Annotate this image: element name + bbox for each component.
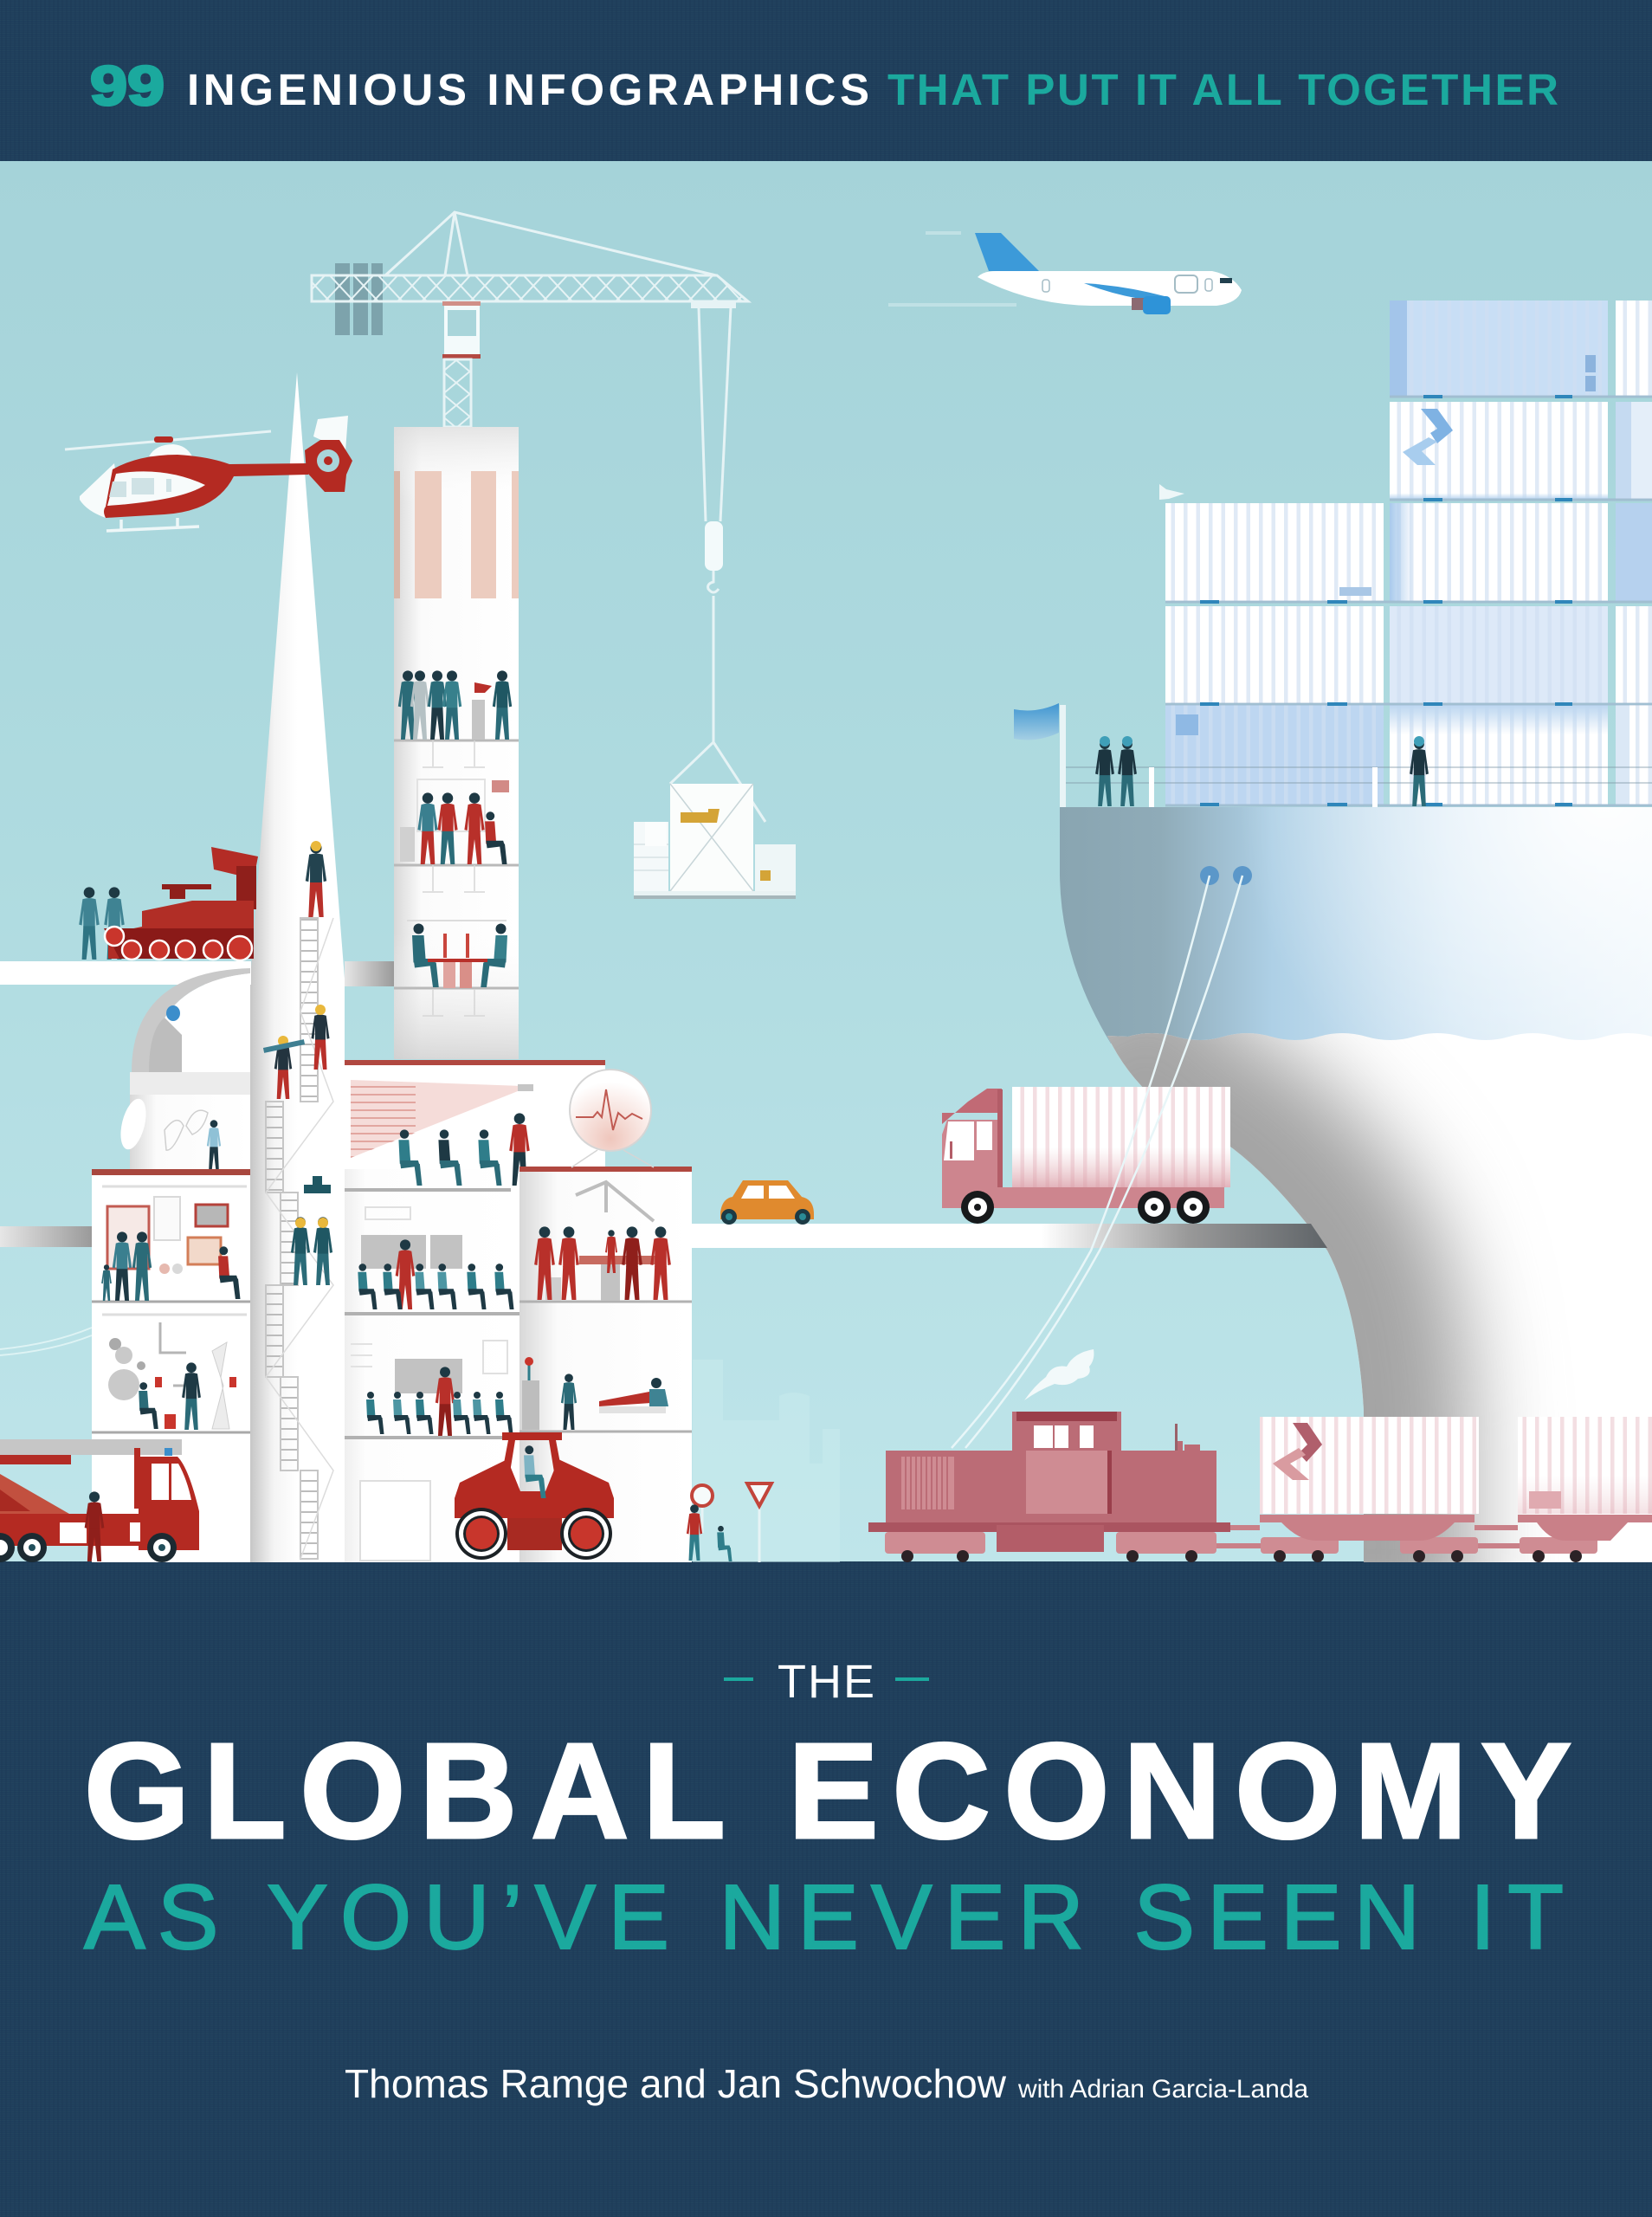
illustration: central building [345, 1060, 605, 1562]
cab [139, 1457, 199, 1550]
body [0, 1514, 139, 1546]
wheels [0, 1533, 177, 1562]
red body [104, 455, 308, 518]
cargo [634, 784, 796, 899]
cable and sling [670, 596, 765, 822]
hook [708, 571, 719, 592]
floors [394, 740, 519, 988]
cabin window panel [107, 471, 205, 506]
gallery floor [101, 1197, 241, 1301]
speed lines [888, 233, 1016, 305]
cabin [442, 301, 481, 359]
dome slot [149, 1018, 182, 1072]
illustration: tank and soldiers [79, 847, 258, 960]
panel: sky illustration background [0, 161, 1652, 1561]
body [455, 1459, 614, 1518]
text: ingenious infographics: INGENIOUS INFOGRAPHICS [187, 65, 869, 114]
boom [0, 1439, 182, 1455]
wheels [455, 1508, 612, 1560]
authors [345, 2061, 1308, 2106]
illustration: tower with offices [394, 427, 519, 1059]
text: 99: 99 [90, 55, 165, 117]
kneeling person [207, 1120, 221, 1170]
dish [116, 1096, 151, 1152]
wheels [961, 1191, 1210, 1224]
tail ring [305, 440, 352, 492]
ring sign [701, 1508, 703, 1533]
hoist lines [699, 307, 731, 521]
workers [687, 1504, 702, 1561]
co-author: with Adrian Garcia-Landa [1017, 2075, 1308, 2104]
driver [524, 1445, 545, 1498]
container wagon 1 [1260, 1417, 1479, 1541]
lecture hall [351, 1080, 533, 1186]
radar mast [1159, 484, 1184, 500]
heading: the [724, 1656, 929, 1708]
ladders [266, 918, 333, 1559]
illustration: road signs and workers [687, 1483, 771, 1562]
floors [92, 1302, 250, 1432]
illustration: truck [942, 1087, 1230, 1224]
operating room [534, 1182, 671, 1301]
launcher [211, 847, 258, 879]
patient room [522, 1357, 668, 1430]
main authors: Thomas Ramge and Jan Schwochow [345, 2061, 1007, 2106]
illustration: fire truck [0, 1439, 199, 1562]
yield sign [758, 1505, 760, 1562]
faint skyline [693, 1360, 840, 1562]
icon: magnifier with heartbeat [570, 1070, 654, 1167]
fuselage [978, 271, 1242, 306]
trailer [1012, 1087, 1230, 1187]
dome outer ring [132, 968, 250, 1072]
mast lattice [444, 359, 471, 427]
gun and turret [162, 884, 211, 899]
beacon [165, 1448, 172, 1456]
heading: top tagline [90, 55, 1558, 117]
couplers [1216, 1528, 1520, 1546]
soldiers [79, 887, 125, 960]
rotor [65, 431, 271, 449]
container clips [1165, 397, 1652, 805]
illustration: train [868, 1349, 1652, 1562]
flag [1014, 703, 1066, 807]
classroom lower [351, 1341, 513, 1436]
skids [106, 518, 199, 531]
bar: left connector [0, 1226, 92, 1247]
containers column C [1616, 301, 1652, 805]
illustration: left building [92, 1169, 250, 1562]
illustration: plane [888, 233, 1242, 314]
frame [868, 1522, 1230, 1532]
chassis [942, 1187, 1224, 1208]
anchor holes [1200, 866, 1252, 885]
chevron logo on container [1421, 409, 1453, 443]
hook block [705, 521, 723, 571]
illustration: observatory [116, 968, 250, 1170]
panel: bottom band [0, 1561, 1652, 2217]
red roof [345, 1060, 605, 1065]
illustration: main road [692, 1224, 1327, 1248]
illustration: ship hull and containers [1014, 301, 1652, 1645]
illustration: tall spire tower [250, 372, 345, 1562]
people on deck [1095, 736, 1429, 806]
locomotive body [886, 1412, 1216, 1522]
rotor hub [149, 444, 192, 456]
subtitle: as you've never seen it: AS YOU’VE NEVER SEEN IT [84, 1866, 1564, 1968]
wing [1084, 283, 1165, 301]
office: meeting floor 2 [400, 779, 509, 864]
illustration: crane [312, 212, 796, 899]
entrance door [360, 1481, 430, 1561]
counterweights [335, 263, 383, 335]
word the: THE [778, 1656, 874, 1708]
bogies [885, 1532, 1597, 1554]
engine [1132, 298, 1145, 310]
floors [519, 1302, 692, 1432]
illustration: right building [519, 1167, 692, 1562]
office: desk floor 3 [407, 921, 507, 988]
window stripes [394, 471, 519, 598]
containers column B [1390, 301, 1608, 805]
container wagon 2 [1518, 1417, 1652, 1541]
red roof [519, 1167, 692, 1172]
office: meeting floor 1 [398, 670, 512, 740]
title: global economy: GLOBAL ECONOMY [84, 1716, 1571, 1867]
hull above water [1060, 807, 1652, 1044]
workers [263, 841, 332, 1285]
smoke [1024, 1349, 1094, 1400]
tail [975, 233, 1039, 271]
illustration: orange car [720, 1180, 814, 1225]
white nose [80, 463, 121, 518]
tie lines [385, 212, 716, 275]
platform [0, 1455, 71, 1464]
wheels [105, 927, 252, 960]
floor lines [345, 1190, 519, 1438]
fireman [85, 1491, 104, 1561]
base [130, 1072, 250, 1169]
fin [313, 416, 348, 451]
illustration: road roller [455, 1432, 614, 1560]
road: upper left [0, 961, 251, 985]
trolley [691, 302, 736, 308]
hull [108, 901, 254, 959]
helicopter [65, 416, 352, 531]
jib [312, 275, 748, 301]
scribbles [165, 1110, 208, 1150]
dash left [724, 1677, 753, 1681]
classroom upper [358, 1207, 514, 1309]
dash right [895, 1677, 929, 1681]
red roof [92, 1169, 250, 1175]
hull below water [1107, 1033, 1652, 1562]
containers column A [1165, 503, 1384, 805]
machine floor [108, 1322, 236, 1430]
cab frame [502, 1432, 562, 1472]
windows and door [1175, 275, 1197, 293]
train wheels [901, 1550, 1582, 1562]
panel: top band [0, 0, 1652, 161]
bridge between spire and tower [345, 961, 394, 986]
deck railing [1062, 767, 1652, 783]
blue lens [166, 1005, 180, 1021]
cab [942, 1089, 1002, 1124]
windows [109, 478, 171, 497]
text: that put it all together: THAT PUT IT ALL TOGETHER [887, 65, 1558, 114]
anchor cables [952, 876, 1242, 1448]
dome interior [149, 973, 250, 1072]
thin cables at left [0, 1328, 92, 1355]
